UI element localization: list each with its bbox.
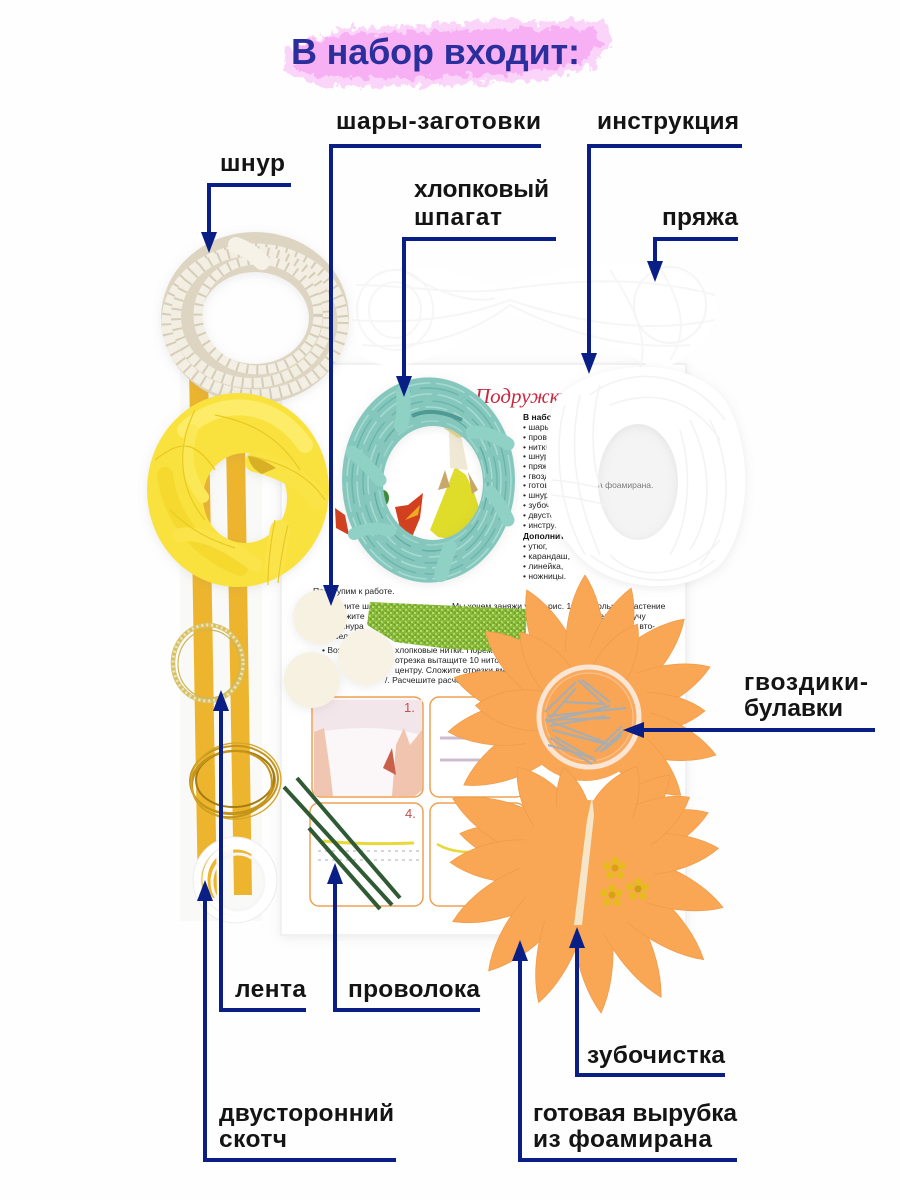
foam balls — [284, 590, 394, 708]
label: двусторонний скотч — [197, 880, 396, 1160]
label: зубочистка: зубочистка — [587, 1042, 725, 1069]
wires — [284, 778, 400, 909]
label: инструкция — [581, 108, 742, 374]
materials list: Дополнитель — [523, 531, 580, 541]
hole contents: tassel doll and flowers — [335, 423, 483, 540]
foam flower bottom — [444, 754, 730, 1015]
work steps text: хлопковые нитки. Порежьте — [395, 645, 505, 655]
label: шары-заготовки: шары-заготовки — [336, 108, 541, 135]
materials list: • инструкц — [523, 520, 564, 530]
white cord coil — [197, 841, 273, 919]
label: двусторонний скотч: двусторонний — [219, 1100, 394, 1127]
work steps text: /. Расчешите расческой. — [385, 675, 481, 685]
materials list: • готов — [523, 480, 549, 490]
foam flower top — [445, 575, 722, 812]
thin gold thread coil — [173, 625, 243, 701]
rope strands — [167, 249, 343, 395]
gold cord coil — [187, 739, 284, 823]
materials list — [523, 412, 653, 581]
sheet title: Подружки — [474, 384, 570, 408]
step card 4 — [310, 803, 423, 906]
work steps text: Приступим к работе. — [313, 586, 394, 596]
title with pink brush stroke — [285, 20, 612, 86]
plastic cup with pins — [539, 667, 639, 767]
work steps text: сделайте кучу — [590, 611, 646, 621]
materials list: • шнур — [523, 451, 549, 461]
materials list: • шары — [523, 422, 551, 432]
yarn strands — [552, 376, 726, 580]
work steps text: угольные растение — [590, 601, 666, 611]
materials list: • пряжа — [523, 461, 553, 471]
twine strands — [347, 383, 511, 579]
work steps text — [313, 586, 666, 685]
work steps text: центру. Сложите отрезки вместе. — [395, 665, 526, 675]
label: гвоздики-булавки: булавки — [744, 695, 843, 722]
work steps text: ы узел — [322, 631, 348, 641]
label: шары-заготовки — [323, 108, 541, 606]
label: гвоздики-булавки — [623, 669, 875, 738]
label: лента: лента — [235, 976, 306, 1003]
label: готовая вырубка из фоамирана: из фоамирана — [533, 1126, 712, 1153]
label: гвоздики-булавки: гвоздики- — [744, 669, 868, 696]
label: шнур — [201, 150, 291, 253]
materials list: а фоамирана. — [598, 480, 653, 490]
materials list: • линейка, — [523, 561, 563, 571]
work steps text: Мы хочем заняжи узе — [452, 601, 537, 611]
materials list: • карандаш, — [523, 551, 570, 561]
work steps text: отрезка вытащите 10 ниток, — [395, 655, 505, 665]
materials list: • зубочис — [523, 500, 560, 510]
white yarn skein — [348, 264, 717, 372]
gold sequins — [600, 857, 649, 906]
pins — [545, 680, 626, 764]
ribbon — [180, 366, 262, 921]
step card 1 — [312, 697, 423, 797]
step card 1: 1. — [404, 700, 415, 715]
materials list: • утюг, — [523, 541, 547, 551]
materials list: • нитки — [523, 442, 550, 452]
green glitter foam strip — [367, 602, 527, 651]
label: хлопковый шпагат — [396, 176, 556, 397]
materials list: • пров — [523, 432, 547, 442]
label: инструкция: инструкция — [597, 108, 739, 135]
label: проволока: проволока — [348, 976, 480, 1003]
materials list: • гвозд — [523, 471, 549, 481]
pink brush stroke — [285, 20, 612, 86]
step card 2 — [430, 697, 525, 797]
label: зубочистка — [569, 927, 725, 1075]
label: пряжа — [647, 204, 738, 282]
materials list: • двустор — [523, 510, 560, 520]
label: шнур: шнур — [220, 150, 285, 177]
materials list: • ножницы. — [523, 571, 566, 581]
toothpick — [574, 797, 594, 925]
work steps text: на, затем вто- — [600, 621, 655, 631]
label: готовая вырубка из фоамирана — [512, 940, 737, 1160]
work steps text: . Завяжите — [322, 611, 365, 621]
materials list: В набор — [523, 412, 557, 422]
label: готовая вырубка из фоамирана: готовая вырубка — [533, 1100, 737, 1127]
label: двусторонний скотч: скотч — [219, 1126, 287, 1153]
label: хлопковый шпагат: хлопковый — [414, 176, 549, 203]
label: проволока — [327, 863, 480, 1010]
label: хлопковый шпагат: шпагат — [414, 204, 502, 231]
yellow ring — [147, 393, 329, 587]
teal cotton twine ring — [335, 377, 515, 583]
work steps text: • Возьмите — [322, 645, 365, 655]
title text: В набор входит: — [291, 31, 580, 72]
label: лента — [213, 690, 306, 1010]
work steps text: рис. 1 — [548, 601, 571, 611]
materials list: • шнур — [523, 490, 549, 500]
step card 5 — [430, 803, 525, 906]
panel: kit photo — [147, 245, 745, 1015]
cord ring — [167, 245, 343, 395]
label: пряжа: пряжа — [662, 204, 738, 231]
white yarn ring — [546, 367, 745, 586]
step card 4: 4. — [405, 806, 416, 821]
work steps text: Возьмите шнур — [322, 601, 383, 611]
work steps text: нце шнура — [322, 621, 364, 631]
instruction sheet — [281, 364, 686, 935]
